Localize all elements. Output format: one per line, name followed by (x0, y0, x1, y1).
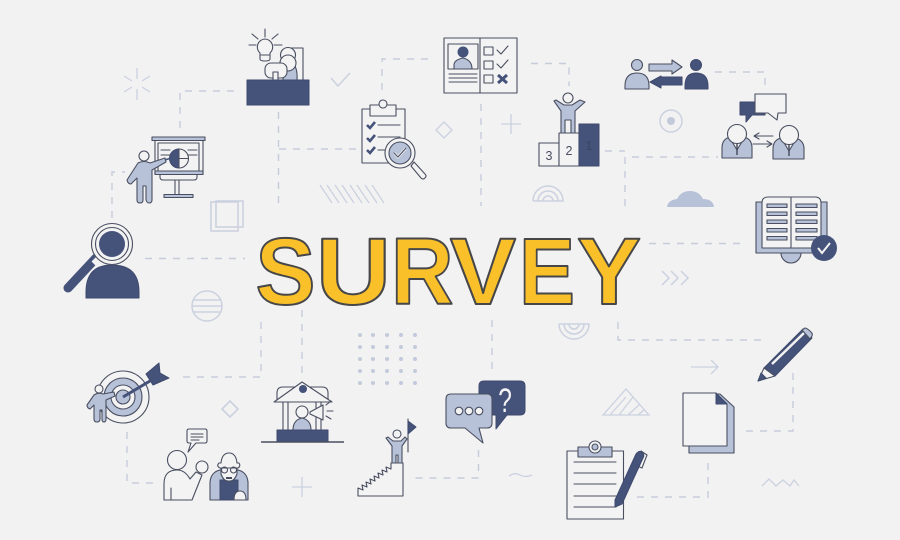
icon: target with arrow (87, 363, 169, 423)
title: V (450, 219, 516, 325)
icon: pencil (758, 328, 812, 381)
title: U (316, 219, 391, 325)
icon: open book with check badge (756, 197, 837, 263)
icon: person under magnifier (68, 224, 139, 298)
icon: clipboard with pen (567, 441, 647, 519)
icon: person with flag on top of stairs (358, 419, 416, 496)
icon: presenter with pie chart board (127, 137, 205, 203)
icon: two colleagues in conversation (722, 94, 804, 159)
icon: profile sheet with checkboxes (444, 38, 517, 93)
dot grid (358, 333, 417, 385)
title: R (391, 219, 454, 325)
title: S (256, 219, 316, 325)
icon: person talking to old man (164, 429, 248, 500)
title: Y (577, 219, 641, 325)
cloud (667, 191, 714, 207)
icon: winner podium: 1 (586, 139, 593, 153)
icon: winner podium (539, 93, 599, 166)
icon: winner podium: 2 (566, 144, 573, 158)
icon: checklist clipboard with magnifier (362, 100, 426, 179)
icon: winner podium: 3 (546, 149, 553, 163)
icon: speaker at podium with megaphone (261, 382, 344, 442)
icon: stacked documents (683, 393, 734, 453)
icon: idea desk (247, 29, 309, 105)
icon: people exchanging arrows (625, 60, 708, 89)
icon: speech bubbles: ? (498, 382, 512, 420)
title: E (519, 219, 575, 325)
icon: speech bubbles (446, 381, 525, 443)
decorative background shapes (124, 68, 799, 497)
dashed connector lines (112, 59, 793, 497)
